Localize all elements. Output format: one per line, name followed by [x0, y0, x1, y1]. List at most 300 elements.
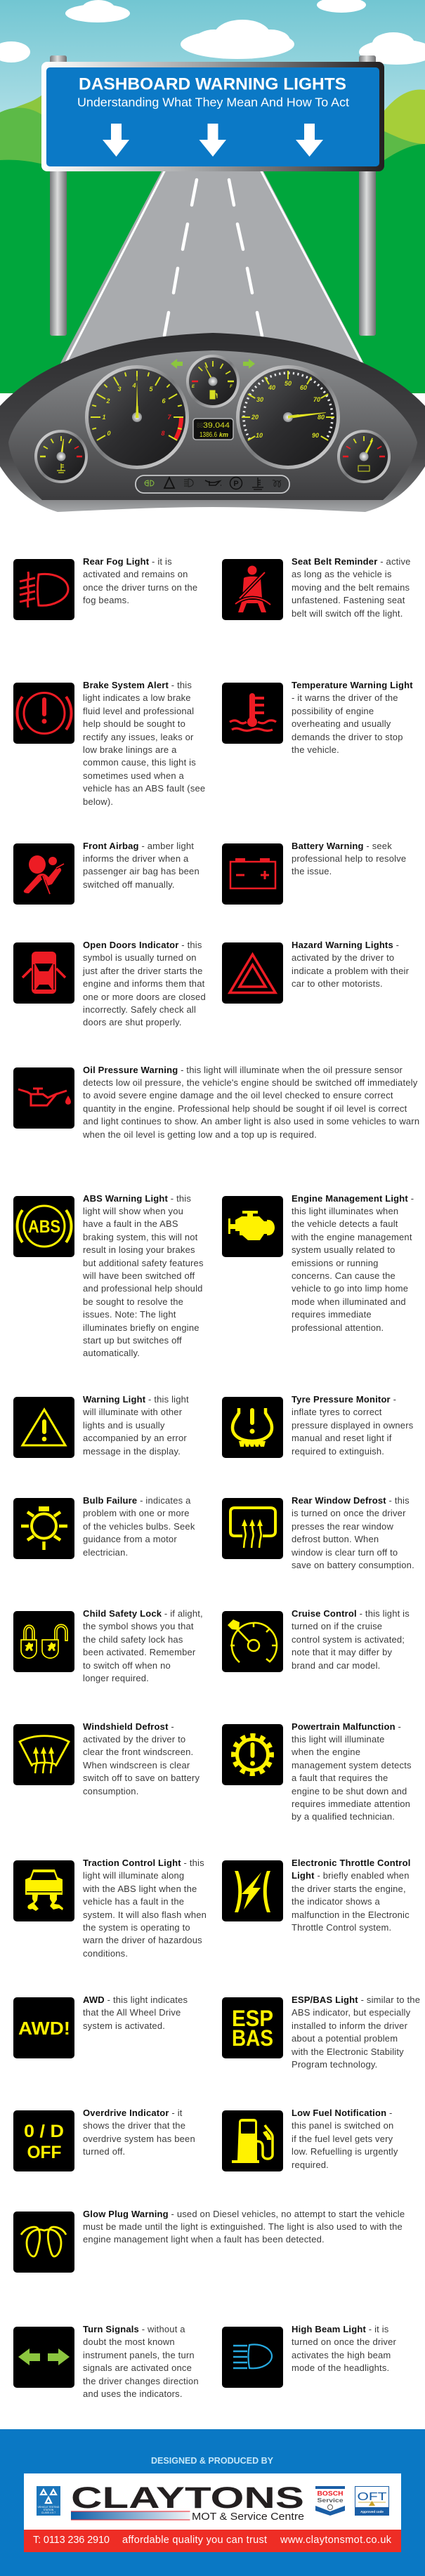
- road: [58, 169, 367, 369]
- icon: cruise control: [222, 1611, 283, 1672]
- text: warning light: accompanied by an error: [83, 1433, 187, 1443]
- fuel gauge: F: [230, 385, 233, 389]
- text: ESP BAS: with the Electronic Stability: [292, 2046, 404, 2057]
- text: seat belt: Seat Belt Reminder - active: [292, 556, 411, 567]
- text: brake: vehicle has an ABS fault (see: [83, 783, 205, 794]
- text: low fuel: if the fuel level gets very: [292, 2134, 393, 2144]
- text: overdrive: shows the driver that the: [83, 2120, 185, 2131]
- text: child lock: longer required.: [83, 1673, 149, 1683]
- text: overdrive: overdrive system has been: [83, 2134, 195, 2144]
- odometer: km: [219, 431, 228, 438]
- text: traction: the system is operating to: [83, 1922, 190, 1933]
- text: powertrain: when the engine: [292, 1747, 360, 1757]
- text: oil pressure: when the oil level is getting low and a top up is required.: [83, 1129, 317, 1140]
- text: low fuel: low. Refuelling is urgently: [292, 2146, 398, 2157]
- text: battery: professional help to resolve: [292, 853, 406, 864]
- text: hazard: activated by the driver to: [292, 952, 394, 963]
- text: traction: warn the driver of hazardous: [83, 1935, 202, 1945]
- text: tyre pressure: inflate tyres to correct: [292, 1407, 382, 1417]
- text: ABS: have a fault in the ABS: [83, 1218, 178, 1229]
- text: traction: Traction Control Light - this: [83, 1858, 204, 1868]
- icon: throttle: [222, 1860, 283, 1921]
- text: turn signals: and uses the indicators.: [83, 2388, 183, 2399]
- text: temperature: [292, 680, 413, 755]
- text: cruise control: turned on if the cruise: [292, 1621, 382, 1631]
- fuel gauge: [186, 355, 240, 408]
- text: oil pressure: [83, 1065, 419, 1140]
- text: engine: system usually related to: [292, 1244, 395, 1255]
- text: open doors: Open Doors Indicator - this: [83, 940, 202, 950]
- icon: temperature: [222, 683, 283, 744]
- text: windshield defrost: [83, 1721, 200, 1798]
- text: hazard: Hazard Warning Lights -: [292, 940, 399, 950]
- text: windshield defrost: switch off to save on battery: [83, 1773, 200, 1783]
- item: powertrain malfunction: [222, 1723, 422, 1827]
- tachometer: 5: [149, 386, 153, 393]
- text: warning light: will illuminate with other: [83, 1407, 182, 1417]
- item: seat belt reminder: [222, 556, 411, 620]
- text: ABS: [83, 1192, 204, 1358]
- item: ABS warning: [13, 1192, 204, 1358]
- text: temperature: Temperature Warning Light: [292, 680, 413, 690]
- text: open doors: symbol is usually turned on: [83, 952, 197, 963]
- MOT logo: CLASS 4 5 7: [41, 2511, 55, 2514]
- hero: road scene with sign and dashboard: [0, 0, 425, 512]
- text: rear defrost: [292, 1494, 414, 1572]
- text: turn signals: the driver changes direction: [83, 2376, 199, 2386]
- text: powertrain: by a qualified technician.: [292, 1811, 395, 1822]
- icon: ABS: ABS: [28, 1216, 60, 1236]
- icon: AWD: AWD!: [18, 2018, 70, 2039]
- text: rear fog: activated and remains on: [83, 569, 188, 579]
- text: ABS: start up but switches off: [83, 1335, 182, 1346]
- icon: windshield defrost: [13, 1723, 74, 1785]
- text: tyre pressure: pressure displayed in owners: [292, 1420, 413, 1431]
- text: bulb failure: electrician.: [83, 1547, 128, 1558]
- text: cruise control: note that it may differ by: [292, 1647, 392, 1657]
- text: cruise control: Cruise Control - this light is: [292, 1608, 410, 1619]
- text: ABS: ABS Warning Light - this: [83, 1192, 191, 1204]
- text: powertrain: a fault that requires the: [292, 1773, 388, 1783]
- text: engine: with the engine management: [292, 1232, 412, 1242]
- contact bar: T: 0113 236 2910: [33, 2535, 110, 2546]
- text: ABS: be sought to resolve the: [83, 1296, 183, 1307]
- text: temperature: possibility of engine: [292, 706, 374, 716]
- fuel pump mini icon: [210, 390, 217, 399]
- text: AWD: system is activated.: [83, 2020, 165, 2031]
- contact bar: affordable quality you can trust: [122, 2535, 267, 2546]
- icon: hazard: [222, 942, 283, 1004]
- MOT logo: STATION: [44, 2509, 54, 2511]
- MOT logo: VEHICLE TESTING: [37, 2506, 60, 2509]
- road sign: [41, 62, 384, 171]
- icon: glow plug: [13, 2211, 74, 2273]
- text: ESP BAS: [292, 1994, 420, 2071]
- icon: turn signals: [13, 2327, 74, 2388]
- text: AWD: [83, 1994, 188, 2032]
- text: windshield defrost: clear the front windscreen.: [83, 1747, 193, 1757]
- text: engine: emissions or running: [292, 1258, 379, 1268]
- text: rear defrost: Rear Window Defrost - this: [292, 1495, 410, 1506]
- Bosch logo: [315, 2486, 345, 2516]
- temperature mini icon: [57, 464, 65, 473]
- tell-tale strip: P: [233, 480, 239, 488]
- contact bar: [24, 2530, 401, 2552]
- text: child lock: [83, 1608, 203, 1685]
- icon: engine: [222, 1196, 283, 1257]
- icon: seat belt: [222, 559, 283, 620]
- fuel gauge: E: [192, 385, 195, 389]
- text: low fuel: [292, 2107, 398, 2171]
- text: brake: low brake linings are a: [83, 744, 177, 755]
- text: bulb failure: problem with one or more: [83, 1508, 190, 1518]
- text: ESP BAS: Program technology.: [292, 2059, 377, 2070]
- sign arrows: [103, 124, 323, 157]
- speedometer: [236, 365, 340, 469]
- gradient bar: [71, 2511, 190, 2520]
- text: ABS: automatically.: [83, 1348, 140, 1358]
- icon: airbag: [13, 843, 74, 905]
- tachometer: 1: [102, 414, 106, 421]
- text: bulb failure: guidance from a motor: [83, 1534, 177, 1544]
- speedometer: 40: [268, 384, 275, 391]
- item: windshield defrost: [13, 1723, 208, 1801]
- text: rear fog: once the driver turns on the: [83, 582, 197, 593]
- text: warning light: lights and is usually: [83, 1420, 165, 1431]
- icon: child lock: [13, 1611, 74, 1672]
- speedometer: 30: [256, 396, 263, 403]
- tachometer: 7: [167, 414, 171, 421]
- text: powertrain: this light will illuminate: [292, 1734, 385, 1744]
- text: child lock: been activated. Remember: [83, 1647, 195, 1657]
- text: hazard: indicate a problem with their: [292, 966, 409, 976]
- text: tyre pressure: required to extinguish.: [292, 1446, 384, 1457]
- text: child lock: the symbol shows you that: [83, 1621, 194, 1631]
- text: airbag: informs the driver when a: [83, 853, 188, 864]
- tachometer: 0: [107, 430, 111, 437]
- icon: overdrive off: 0 / D: [24, 2122, 64, 2141]
- grass: [0, 144, 425, 393]
- text: throttle: [292, 1857, 411, 1934]
- text: windshield defrost: activated by the driver to: [83, 1734, 185, 1744]
- text: glow plug: [83, 2208, 405, 2247]
- text: child lock: Child Safety Lock - if alight,: [83, 1608, 203, 1619]
- text: high beam: turned on once the driver: [292, 2337, 396, 2347]
- text: bulb failure: [83, 1494, 195, 1559]
- icon: rear fog: [13, 559, 74, 620]
- Claytons wordmark: CLAYTONS: [71, 2481, 304, 2515]
- text: throttle: the indicator shows a: [292, 1896, 380, 1907]
- logo panel: [24, 2473, 401, 2530]
- text: turn signals: signals are activated once: [83, 2363, 192, 2373]
- item: open doors: [13, 940, 206, 1027]
- text: turn signals: doubt the most known: [83, 2337, 175, 2347]
- speedometer: 70: [313, 396, 320, 403]
- text: brake: fluid level and professional: [83, 706, 194, 716]
- text: ESP BAS: about a potential problem: [292, 2033, 398, 2044]
- text: powertrain: [292, 1721, 412, 1824]
- text: low fuel: this panel is switched on: [292, 2120, 393, 2131]
- speedometer: 50: [285, 380, 292, 387]
- text: glow plug: Glow Plug Warning - used on Diesel vehicles, no attempt to start the vehicle: [83, 2208, 405, 2219]
- text: hazard: car to other motorists.: [292, 978, 383, 989]
- contact bar: www.claytonsmot.co.uk: [280, 2535, 392, 2546]
- icon: open doors: [13, 942, 74, 1004]
- text: seat belt: unfastened. Fastening seat: [292, 595, 405, 605]
- text: ABS: will have been switched off: [83, 1270, 195, 1281]
- MOT logo: [37, 2486, 60, 2516]
- text: low fuel: required.: [292, 2160, 329, 2170]
- text: overdrive: turned off.: [83, 2146, 125, 2157]
- text: traction: vehicle has a fault in the: [83, 1896, 184, 1907]
- text: brake: [83, 680, 205, 807]
- text: traction: light will illuminate along: [83, 1870, 184, 1881]
- text: engine: professional attention.: [292, 1322, 384, 1333]
- text: high beam: activates the high beam: [292, 2350, 391, 2360]
- text: brake: light indicates a low brake: [83, 692, 191, 703]
- text: throttle: the driver starts the engine,: [292, 1884, 406, 1894]
- text: ABS: result in losing your brakes: [83, 1244, 195, 1255]
- footer credit heading: DESIGNED & PRODUCED BY: [151, 2456, 274, 2466]
- text: ABS: and professional help should: [83, 1283, 203, 1294]
- text: rear defrost: save on battery consumption.: [292, 1560, 414, 1570]
- icon: overdrive off: [13, 2110, 74, 2171]
- text: tyre pressure: Tyre Pressure Monitor -: [292, 1394, 396, 1405]
- text: AWD: that the All Wheel Drive: [83, 2007, 181, 2018]
- OFT logo: Approved code: [360, 2510, 384, 2513]
- text: engine: the vehicle detects a fault: [292, 1218, 398, 1229]
- icon: battery: [222, 843, 283, 905]
- speedometer: 90: [312, 432, 319, 439]
- text: cruise control: [292, 1608, 410, 1672]
- footer: [0, 2429, 425, 2576]
- text: traction: system. It will also flash when: [83, 1910, 207, 1920]
- Bosch logo: BOSCH: [318, 2490, 343, 2497]
- clouds: [0, 0, 425, 65]
- text: windshield defrost: Windshield Defrost -: [83, 1721, 174, 1732]
- text: throttle: Electronic Throttle Control: [292, 1858, 411, 1868]
- icon: AWD: [13, 1997, 74, 2058]
- text: open doors: just after the driver starts the: [83, 966, 202, 976]
- text: ABS: braking system, this will not: [83, 1232, 197, 1242]
- text: glow plug: engine management light when a fault has been detected.: [83, 2234, 325, 2245]
- text: turn signals: Turn Signals - without a: [83, 2324, 185, 2334]
- tachometer: [85, 365, 189, 469]
- text: rear defrost: presses the rear window: [292, 1521, 393, 1532]
- text: airbag: Front Airbag - amber light: [83, 840, 194, 851]
- text: high beam: [292, 2323, 396, 2375]
- odometer: 88: [197, 422, 203, 430]
- text: brake: below).: [83, 796, 113, 807]
- item: oil pressure: [13, 1065, 419, 1140]
- text: brake: Brake System Alert - this: [83, 680, 192, 690]
- text: throttle: Light - briefly enabled when: [292, 1870, 410, 1881]
- text: brake: common cause, this light is: [83, 757, 196, 768]
- text: brake: help should be sought to: [83, 718, 185, 729]
- item: child safety lock: [13, 1611, 208, 1688]
- text: powertrain: management system detects: [292, 1760, 412, 1770]
- text: engine: concerns. Can cause the: [292, 1270, 395, 1281]
- text: temperature: demands the driver to stop: [292, 732, 403, 742]
- text: seat belt: [292, 556, 411, 619]
- icon: ESP BAS: ESP: [232, 2006, 273, 2031]
- text: AWD: AWD - this light indicates: [83, 1995, 188, 2005]
- tachometer: 4: [131, 382, 136, 389]
- text: rear fog: fog beams.: [83, 595, 129, 605]
- item: turn signals: [13, 2327, 208, 2404]
- text: oil pressure: and light continues to show. An amber light is also used in some vehicles to warn: [83, 1116, 419, 1126]
- text: battery: [292, 840, 406, 876]
- item: electronic throttle: [222, 1860, 422, 1938]
- text: child lock: to switch off when no: [83, 1660, 171, 1671]
- text: ABS: illuminates briefly on engine: [83, 1322, 200, 1333]
- text: ABS: issues. Note: The light: [83, 1309, 176, 1320]
- text: glow plug: must be made until the light is extinguished. The light is also used to with the: [83, 2221, 403, 2232]
- item: cruise control: [222, 1611, 422, 1676]
- text: temperature: the vehicle.: [292, 744, 339, 755]
- text: oil pressure: Oil Pressure Warning - this light will illuminate when the oil pressure sensor: [83, 1065, 403, 1075]
- text: brake: sometimes used when a: [83, 770, 184, 781]
- sky: [0, 0, 425, 169]
- text: engine: mode when illuminated and: [292, 1296, 406, 1307]
- text: temperature: overheating and usually: [292, 718, 391, 729]
- sign title: DASHBOARD WARNING LIGHTS: [79, 74, 346, 94]
- text: airbag: [83, 840, 200, 890]
- text: ESP BAS: installed to inform the driver: [292, 2020, 407, 2031]
- tachometer: 2: [105, 397, 110, 405]
- speedometer: 60: [300, 384, 307, 391]
- OFT logo: OFT: [357, 2491, 387, 2503]
- text: oil pressure: detects low oil pressure, the vehicle's engine should be switched off immediately: [83, 1077, 417, 1088]
- text: overdrive: [83, 2107, 195, 2159]
- text: ABS: light will show when you: [83, 1206, 183, 1216]
- item: brake system alert: [13, 680, 205, 807]
- text: hazard: [292, 940, 409, 989]
- text: throttle: Throttle Control system.: [292, 1922, 391, 1933]
- text: seat belt: moving and the belt remains: [292, 582, 410, 593]
- text: engine: Engine Management Light -: [292, 1192, 414, 1204]
- item: rear window defrost: [222, 1498, 422, 1575]
- item: bulb failure: [13, 1498, 208, 1559]
- text: ESP BAS: ESP/BAS Light - similar to the: [292, 1995, 420, 2005]
- speedometer: 80: [318, 414, 325, 421]
- text: high beam: High Beam Light - it is: [292, 2324, 388, 2334]
- text: temperature: - it warns the driver of the: [292, 692, 398, 703]
- text: powertrain: requires immediate attention: [292, 1799, 410, 1809]
- text: seat belt: as long as the vehicle is: [292, 569, 392, 579]
- text: rear defrost: window is clear turn off to: [292, 1547, 398, 1558]
- item: hazard warning: [222, 940, 409, 1004]
- tachometer: 8: [161, 430, 165, 437]
- text: rear fog: Rear Fog Light - it is: [83, 556, 172, 567]
- text: bulb failure: Bulb Failure - indicates a: [83, 1495, 191, 1506]
- icon: ABS: [13, 1196, 74, 1257]
- text: engine: [292, 1192, 414, 1333]
- text: cruise control: brand and car model.: [292, 1660, 380, 1671]
- text: turn signals: [83, 2323, 199, 2400]
- text: high beam: mode of the headlights.: [292, 2363, 389, 2373]
- item: traction control: [13, 1860, 208, 1964]
- text: child lock: the child safety lock has: [83, 1634, 183, 1645]
- text: open doors: engine and informs them that: [83, 978, 204, 989]
- dashboard housing: [0, 333, 425, 512]
- odometer: 39.044: [203, 421, 230, 430]
- text: traction: conditions.: [83, 1948, 128, 1959]
- text: warning light: Warning Light - this light: [83, 1394, 189, 1405]
- item: temperature warning: [222, 680, 413, 755]
- text: airbag: passenger air bag has been: [83, 866, 200, 876]
- item: battery warning: [222, 840, 406, 905]
- text: warning light: message in the display.: [83, 1446, 181, 1457]
- item: tyre pressure: [222, 1394, 413, 1458]
- text: seat belt: belt will switch off the light.: [292, 608, 403, 619]
- text: traction: [83, 1857, 207, 1960]
- sign posts: [50, 55, 376, 336]
- text: rear defrost: is turned on once the driver: [292, 1508, 406, 1518]
- icon: powertrain gear: [222, 1723, 283, 1785]
- odometer: 1386.6: [200, 431, 217, 439]
- text: ESP BAS: ABS indicator, but especially: [292, 2007, 410, 2018]
- text: overdrive: Overdrive Indicator - it: [83, 2108, 183, 2118]
- text: open doors: doors are shut properly.: [83, 1017, 182, 1027]
- tell-tale strip: [136, 475, 289, 493]
- text: cruise control: control system is activated;: [292, 1634, 405, 1645]
- item: ESP/BAS: [222, 1997, 422, 2075]
- icon: oil can: [13, 1067, 74, 1129]
- text: open doors: [83, 940, 206, 1027]
- icon: high beam: [222, 2327, 283, 2388]
- item: low fuel: [222, 2110, 422, 2175]
- icon: rear defrost: [222, 1498, 283, 1559]
- icon: brake: [13, 683, 74, 744]
- text: battery: the issue.: [292, 866, 332, 876]
- text: battery: Battery Warning - seek: [292, 840, 392, 851]
- text: engine: this light illuminates when: [292, 1206, 398, 1216]
- item: high beam: [222, 2327, 422, 2388]
- hills: [0, 89, 425, 169]
- icon: tyre pressure: [222, 1397, 283, 1458]
- battery gauge: [337, 430, 391, 483]
- turn arrows: [171, 359, 255, 369]
- sign subtitle: Understanding What They Mean And How To Act: [77, 96, 349, 110]
- icon: traction control: [13, 1860, 74, 1921]
- odometer: [193, 419, 233, 440]
- icon: ESP BAS: BAS: [232, 2025, 273, 2051]
- icon: warning triangle: [13, 1397, 74, 1458]
- text: open doors: incorrectly. Safely check all: [83, 1004, 196, 1015]
- temperature gauge: [34, 430, 88, 483]
- text: tyre pressure: manual and reset light if: [292, 1433, 392, 1443]
- icon: overdrive off: OFF: [27, 2143, 62, 2162]
- text: windshield defrost: consumption.: [83, 1786, 138, 1796]
- text: engine: vehicle to go into limp home: [292, 1283, 408, 1294]
- MOT and service centre: MOT & Service Centre: [192, 2511, 304, 2523]
- text: brake: rectify any issues, leaks or: [83, 732, 194, 742]
- item: AWD: [13, 1997, 208, 2058]
- tachometer: 6: [162, 397, 166, 405]
- speedometer: 10: [256, 432, 263, 439]
- text: powertrain: Powertrain Malfunction -: [292, 1721, 401, 1732]
- Bosch logo: Service: [318, 2497, 344, 2504]
- item: rear fog light: [13, 556, 197, 620]
- text: rear defrost: defrost button. When: [292, 1534, 379, 1544]
- text: warning light: [83, 1394, 189, 1457]
- text: powertrain: engine to be shut down and: [292, 1786, 407, 1796]
- text: oil pressure: to avoid severe engine damage and the oil level checked to ensure correct: [83, 1090, 393, 1100]
- text: oil pressure: quantity in the engine. Professional help should be sought if oil level is correct: [83, 1103, 407, 1114]
- text: windshield defrost: When windscreen is clear: [83, 1760, 190, 1770]
- text: ABS: but additional safety features: [83, 1258, 204, 1268]
